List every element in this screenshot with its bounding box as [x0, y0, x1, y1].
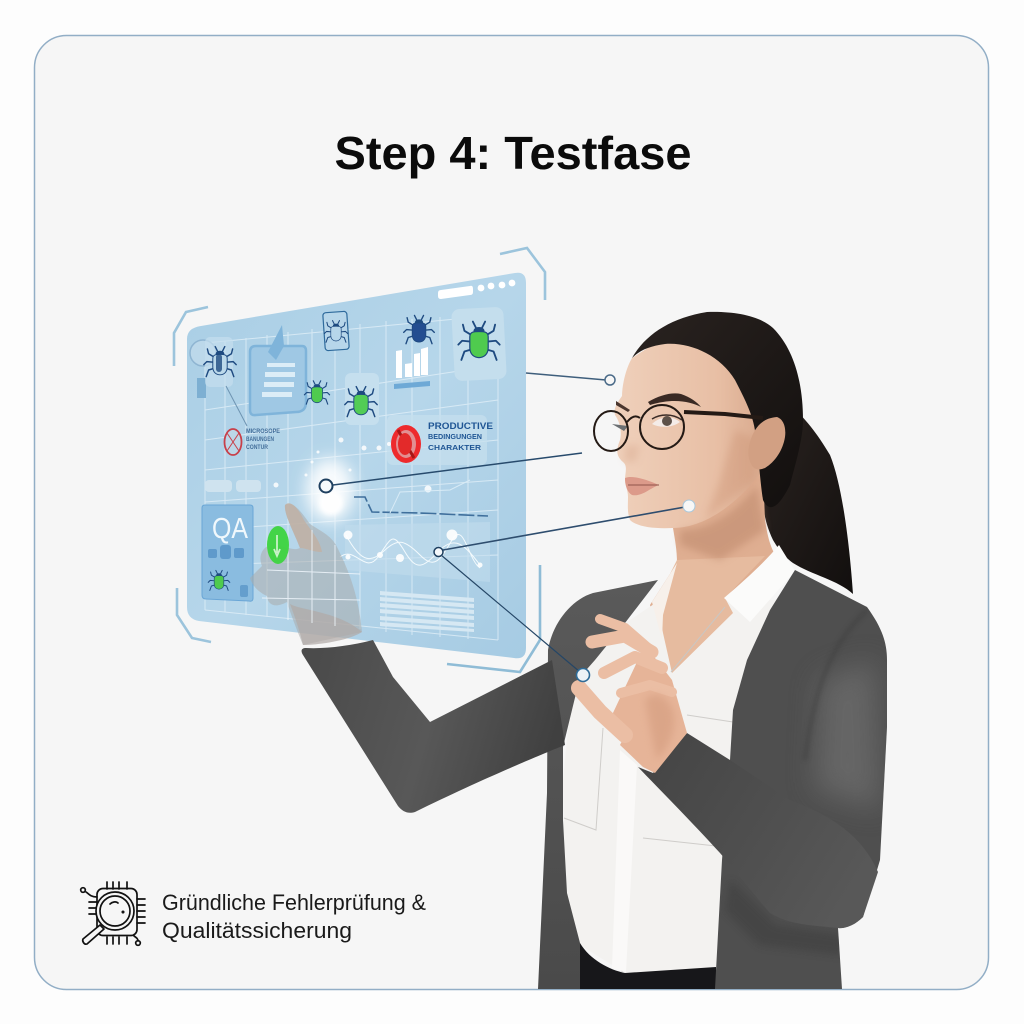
- pale pills: [205, 480, 261, 492]
- warning: crossed circle: [224, 429, 242, 455]
- node: glow point: [320, 480, 332, 492]
- person: [302, 312, 887, 989]
- shirt: [563, 545, 795, 973]
- red bug label text: PRODUCTIVE: [428, 421, 493, 431]
- red bug label text: CHARAKTER: [428, 443, 482, 452]
- hair: [632, 312, 803, 507]
- warning label text: MICROSOPE: [246, 428, 281, 435]
- caption: Gründliche Fehlerprüfung &: [162, 890, 426, 915]
- green action button: [267, 526, 289, 564]
- panel grid: [205, 315, 498, 640]
- icon: boxed bug: [323, 311, 349, 351]
- face shading: [624, 430, 758, 520]
- top bar controls: [438, 280, 515, 299]
- eyebrows: [648, 393, 701, 407]
- collar: [724, 545, 795, 622]
- small bar chart: [394, 347, 430, 389]
- QA card: [202, 505, 253, 601]
- right cardigan panel: [715, 570, 887, 989]
- icon: blue bug: [404, 315, 434, 344]
- pants: [580, 943, 716, 989]
- corner brackets: [174, 248, 545, 672]
- node: forehead: [605, 375, 615, 385]
- holographic panel: [174, 248, 545, 672]
- icon: outline bug and bulb: [190, 337, 247, 426]
- red bug label text: BEDINGUNGEN: [428, 432, 482, 441]
- left sleeve: [302, 640, 565, 813]
- translucent pointing hand: [250, 503, 362, 645]
- cardigan shading: [729, 665, 884, 954]
- neck: [650, 470, 779, 680]
- ponytail: [763, 405, 853, 594]
- connector lines and nodes: [320, 373, 695, 682]
- title: Step 4: Testfase: [334, 127, 692, 179]
- pockets and placket: [564, 715, 733, 972]
- forearm sleeve: [638, 733, 878, 928]
- glow burst at touch point: [274, 438, 432, 522]
- warning label text: BANUNGEN: [246, 436, 274, 443]
- eyes: [612, 415, 682, 431]
- caption: Qualitätssicherung: [162, 918, 352, 943]
- panel surface: [187, 273, 526, 658]
- trend line: [354, 480, 488, 516]
- lips: [625, 477, 659, 495]
- red bug card: [387, 415, 487, 465]
- wave chart: [340, 522, 490, 582]
- face and head: [615, 340, 785, 528]
- icon: green bug medium: [345, 373, 379, 425]
- neck shadow: [680, 485, 765, 560]
- node: chart: [434, 548, 443, 556]
- stripes block: [380, 591, 474, 632]
- warning label text: [246, 428, 281, 451]
- icon: checklist document: [250, 325, 306, 415]
- icon: green bug small: [304, 381, 330, 404]
- node: fingertip: [576, 668, 590, 682]
- warning label text: CONTUR: [246, 444, 268, 451]
- icon: large green bug: [451, 307, 507, 381]
- node: chin: [683, 500, 695, 512]
- icon: chip with magnifier: [81, 882, 145, 945]
- glasses: [594, 405, 763, 451]
- QA card: QA: [212, 513, 249, 545]
- left cardigan panel: [538, 580, 658, 989]
- right hand: [579, 619, 687, 773]
- caption: [162, 890, 426, 943]
- red bug label text: [428, 421, 493, 452]
- ear: [748, 417, 785, 469]
